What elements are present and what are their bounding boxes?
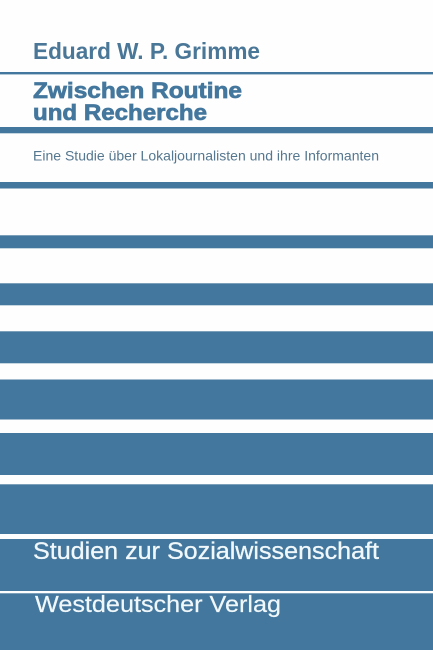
author name: Eduard W. P. Grimme	[33, 38, 260, 64]
title	[33, 78, 242, 125]
series name: Studien zur Sozialwissenschaft	[33, 538, 379, 565]
title: Zwischen Routine	[33, 78, 242, 103]
subtitle: Eine Studie über Lokaljournalisten und ihre Informanten	[33, 148, 379, 164]
title: und Recherche	[33, 100, 207, 125]
publisher: Westdeutscher Verlag	[35, 591, 281, 617]
